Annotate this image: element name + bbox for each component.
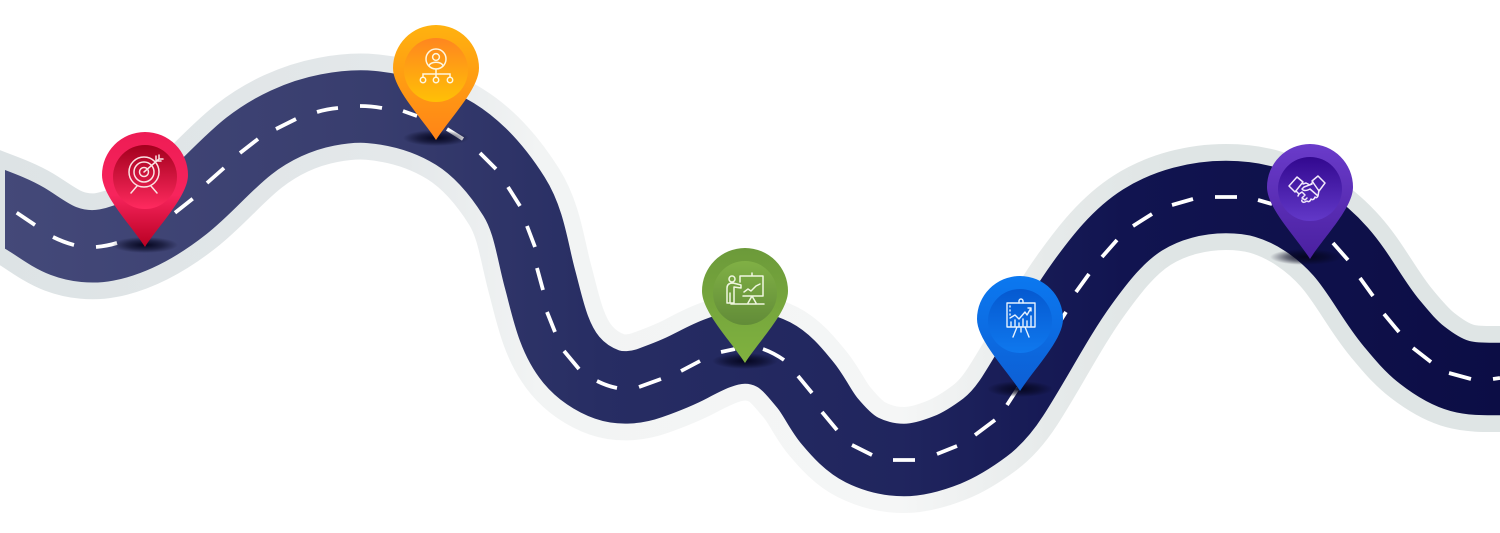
pin shadow xyxy=(403,130,469,146)
road xyxy=(0,106,1500,460)
road centre dashes xyxy=(17,106,1500,460)
pin shadow xyxy=(987,381,1053,397)
pin shadow xyxy=(1270,249,1342,265)
pin 2: orange hierarchy xyxy=(393,25,479,146)
pin shadow xyxy=(712,353,778,369)
pin 3: green presentation xyxy=(702,248,788,369)
pin inner disc xyxy=(113,145,177,209)
pin shadow xyxy=(112,237,178,253)
road outer halo xyxy=(0,107,1500,460)
pin body xyxy=(702,248,788,363)
pin inner disc xyxy=(713,261,777,325)
icon: presenter at board xyxy=(727,273,764,304)
icon: chart on easel xyxy=(1007,299,1035,337)
road surface xyxy=(0,107,1500,460)
pin body xyxy=(393,25,479,140)
pin body xyxy=(977,276,1063,391)
pin inner disc xyxy=(404,38,468,102)
pin 5: purple handshake xyxy=(1267,144,1353,265)
pin inner disc xyxy=(1278,157,1342,221)
icon: handshake xyxy=(1289,176,1325,202)
icon: person hierarchy xyxy=(420,49,453,83)
pin body xyxy=(1267,144,1353,259)
pin body xyxy=(102,132,188,247)
icon: target xyxy=(129,155,163,193)
pin inner disc xyxy=(988,289,1052,353)
pin 1: red target xyxy=(102,132,188,253)
pin 4: blue growth chart xyxy=(977,276,1063,397)
